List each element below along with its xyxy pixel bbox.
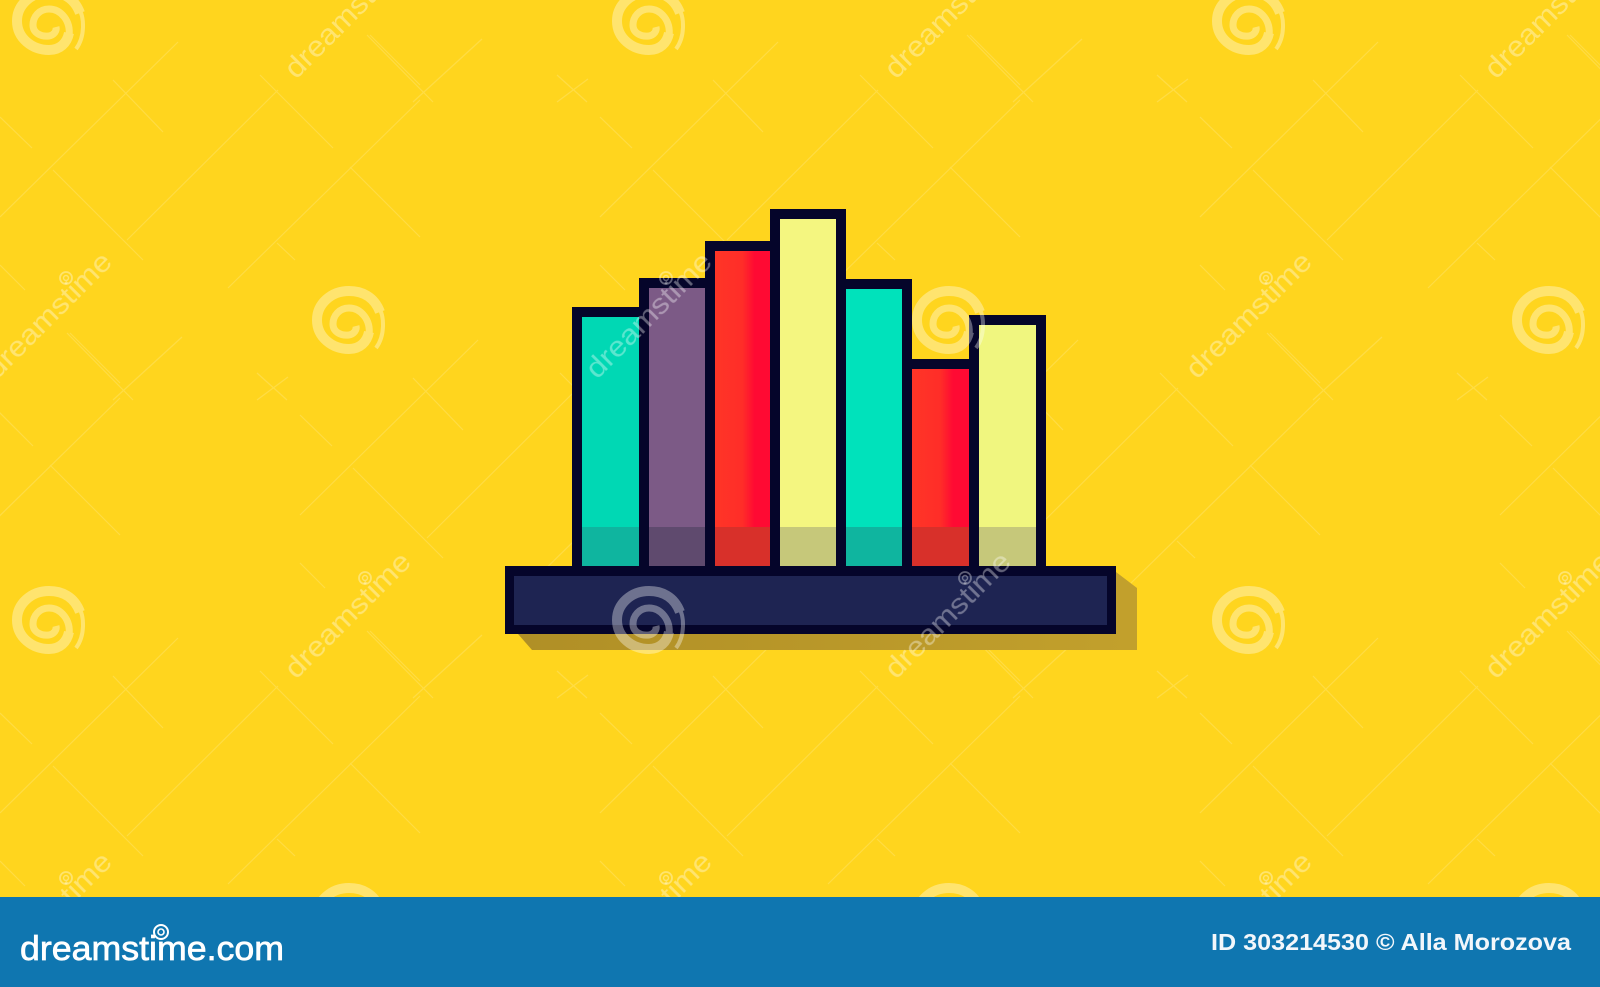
bar 7: pale yellow (969, 315, 1046, 569)
base shadow (518, 572, 1137, 650)
watermark text: dreamstime (579, 846, 719, 985)
bottom banner (0, 897, 1600, 987)
watermark text: dreamstime (579, 246, 719, 385)
watermark text: dreamstime (278, 546, 418, 685)
bar 2: purple (639, 278, 715, 569)
watermark text: dreamstime (878, 546, 1018, 685)
watermark text: dreamstime (1179, 246, 1319, 385)
bar 1: teal (572, 307, 649, 569)
brand logo text: dreamstime.com (20, 930, 284, 968)
watermark text: dreamstime (1179, 846, 1319, 985)
icon: logo spiral (154, 925, 168, 939)
navy base (505, 566, 1116, 634)
bar chart icon (505, 209, 1137, 650)
bar 6: red (902, 359, 979, 569)
bar 3: red (705, 241, 780, 569)
bar 4: pale yellow (770, 209, 846, 569)
image id and credit: ID 303214530 © Alla Morozova (1211, 929, 1571, 955)
bar 5: teal (845, 279, 912, 569)
